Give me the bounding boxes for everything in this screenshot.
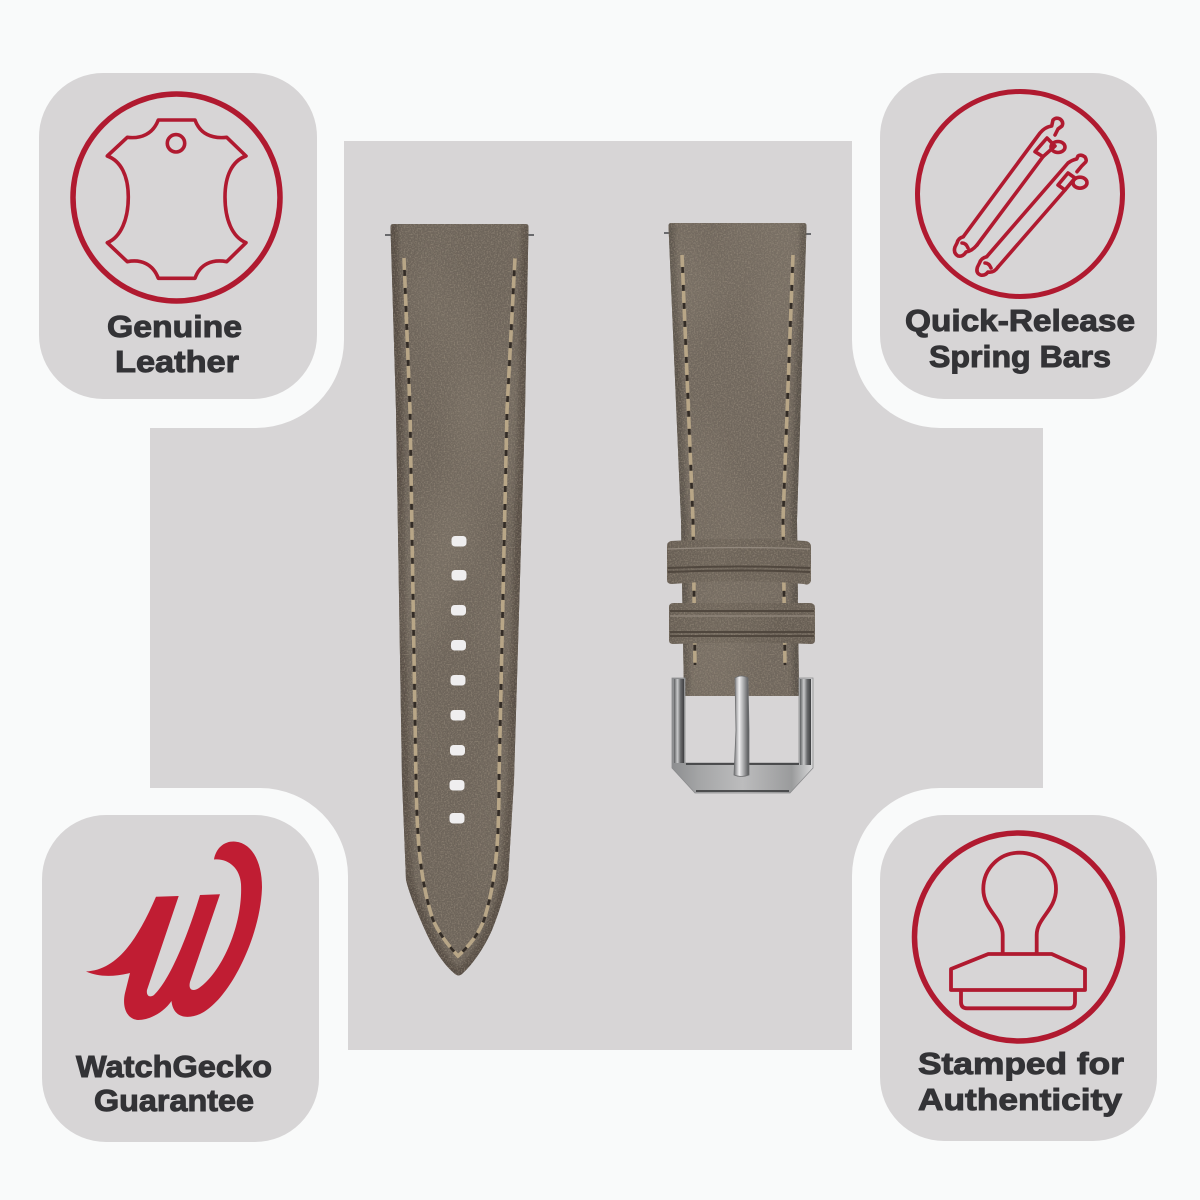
first bar — [954, 118, 1065, 256]
heading: quick-release spring bars: Spring Bars — [929, 339, 1111, 374]
panel: genuine leather — [39, 73, 317, 399]
stitching — [682, 255, 793, 665]
spring bar ends — [664, 233, 811, 234]
card halo: bottom right — [852, 788, 1200, 1200]
heading: stamped for authenticity: Authenticity — [918, 1082, 1123, 1117]
heading: quick-release spring bars — [905, 303, 1135, 374]
icon: leather hide — [73, 94, 280, 301]
heading: genuine leather — [107, 309, 242, 379]
panel: watchgecko guarantee — [42, 815, 319, 1142]
spring bar ends — [385, 234, 534, 236]
panel: stamped for authenticity — [880, 815, 1157, 1141]
long watch strap — [380, 215, 540, 985]
short watch strap with buckle — [660, 215, 815, 793]
heading: watchgecko guarantee — [76, 1049, 272, 1118]
background panel — [150, 141, 1043, 1050]
stitching — [404, 258, 515, 956]
heading: genuine leather: Leather — [115, 344, 239, 379]
icon: spring bars — [918, 92, 1122, 296]
heading: watchgecko guarantee: Guarantee — [94, 1083, 254, 1118]
second bar — [977, 155, 1087, 275]
strap loops — [667, 539, 815, 644]
heading: genuine leather: Genuine — [107, 309, 242, 344]
heading: stamped for authenticity — [918, 1046, 1124, 1117]
card halo: top left — [0, 0, 344, 428]
panel: quick-release spring bars — [880, 73, 1157, 399]
heading: watchgecko guarantee: WatchGecko — [76, 1049, 272, 1084]
card halo: top right — [852, 0, 1200, 428]
icon: stamp — [914, 833, 1122, 1041]
strap holes — [450, 536, 466, 824]
heading: quick-release spring bars: Quick-Release — [905, 303, 1135, 338]
heading: stamped for authenticity: Stamped for — [918, 1046, 1124, 1081]
buckle — [672, 676, 813, 793]
icon: watchgecko logo — [86, 842, 262, 1020]
card halo: bottom left — [0, 788, 348, 1200]
